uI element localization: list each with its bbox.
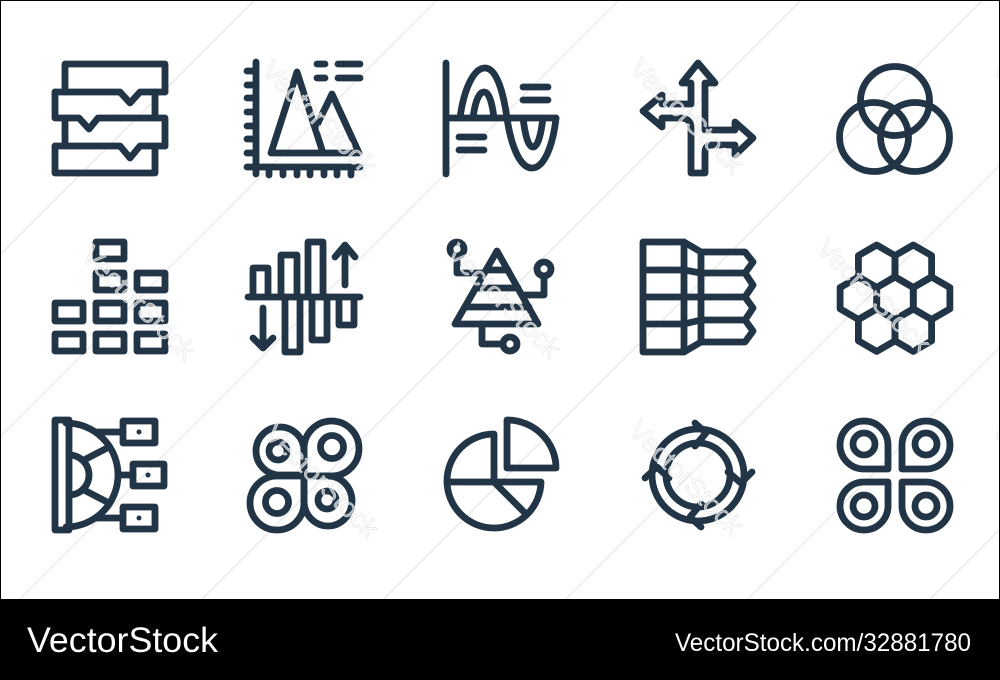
icon: honeycomb [840,245,950,351]
icon: sine wave chart [446,63,556,174]
footer brand name: VectorStock [27,621,219,660]
watermark text: VectorStock [256,55,382,181]
icon: three-way direction arrows [643,63,753,173]
watermark text: VectorStock [811,233,937,359]
watermark text: VectorStock [441,238,567,364]
icon: mountain chart [247,62,360,175]
watermark text: VectorStock [259,418,385,544]
watermark text [0,53,1000,544]
footer image id: VectorStock.com/32881780 [675,629,971,657]
icon: four-petal rings, offset [250,421,359,530]
icon: block level chart [55,242,165,351]
watermark text: VectorStock [624,53,750,179]
watermark text: VectorStock [76,240,202,366]
icon: four petals with rings [840,421,950,530]
icon: table funnel with tags [643,242,753,352]
icon: circular arrows [645,423,752,527]
icon: venn diagram [840,66,950,172]
icon: stacked layers with notches [55,64,165,173]
icon: up and down bar chart [248,242,360,352]
icon: layered pyramid with nodes [450,242,551,351]
watermark text: VectorStock [623,415,749,541]
footer bar [0,599,1000,680]
icon: semicircle hierarchy diagram [55,420,164,530]
icon: pie chart [447,420,556,528]
